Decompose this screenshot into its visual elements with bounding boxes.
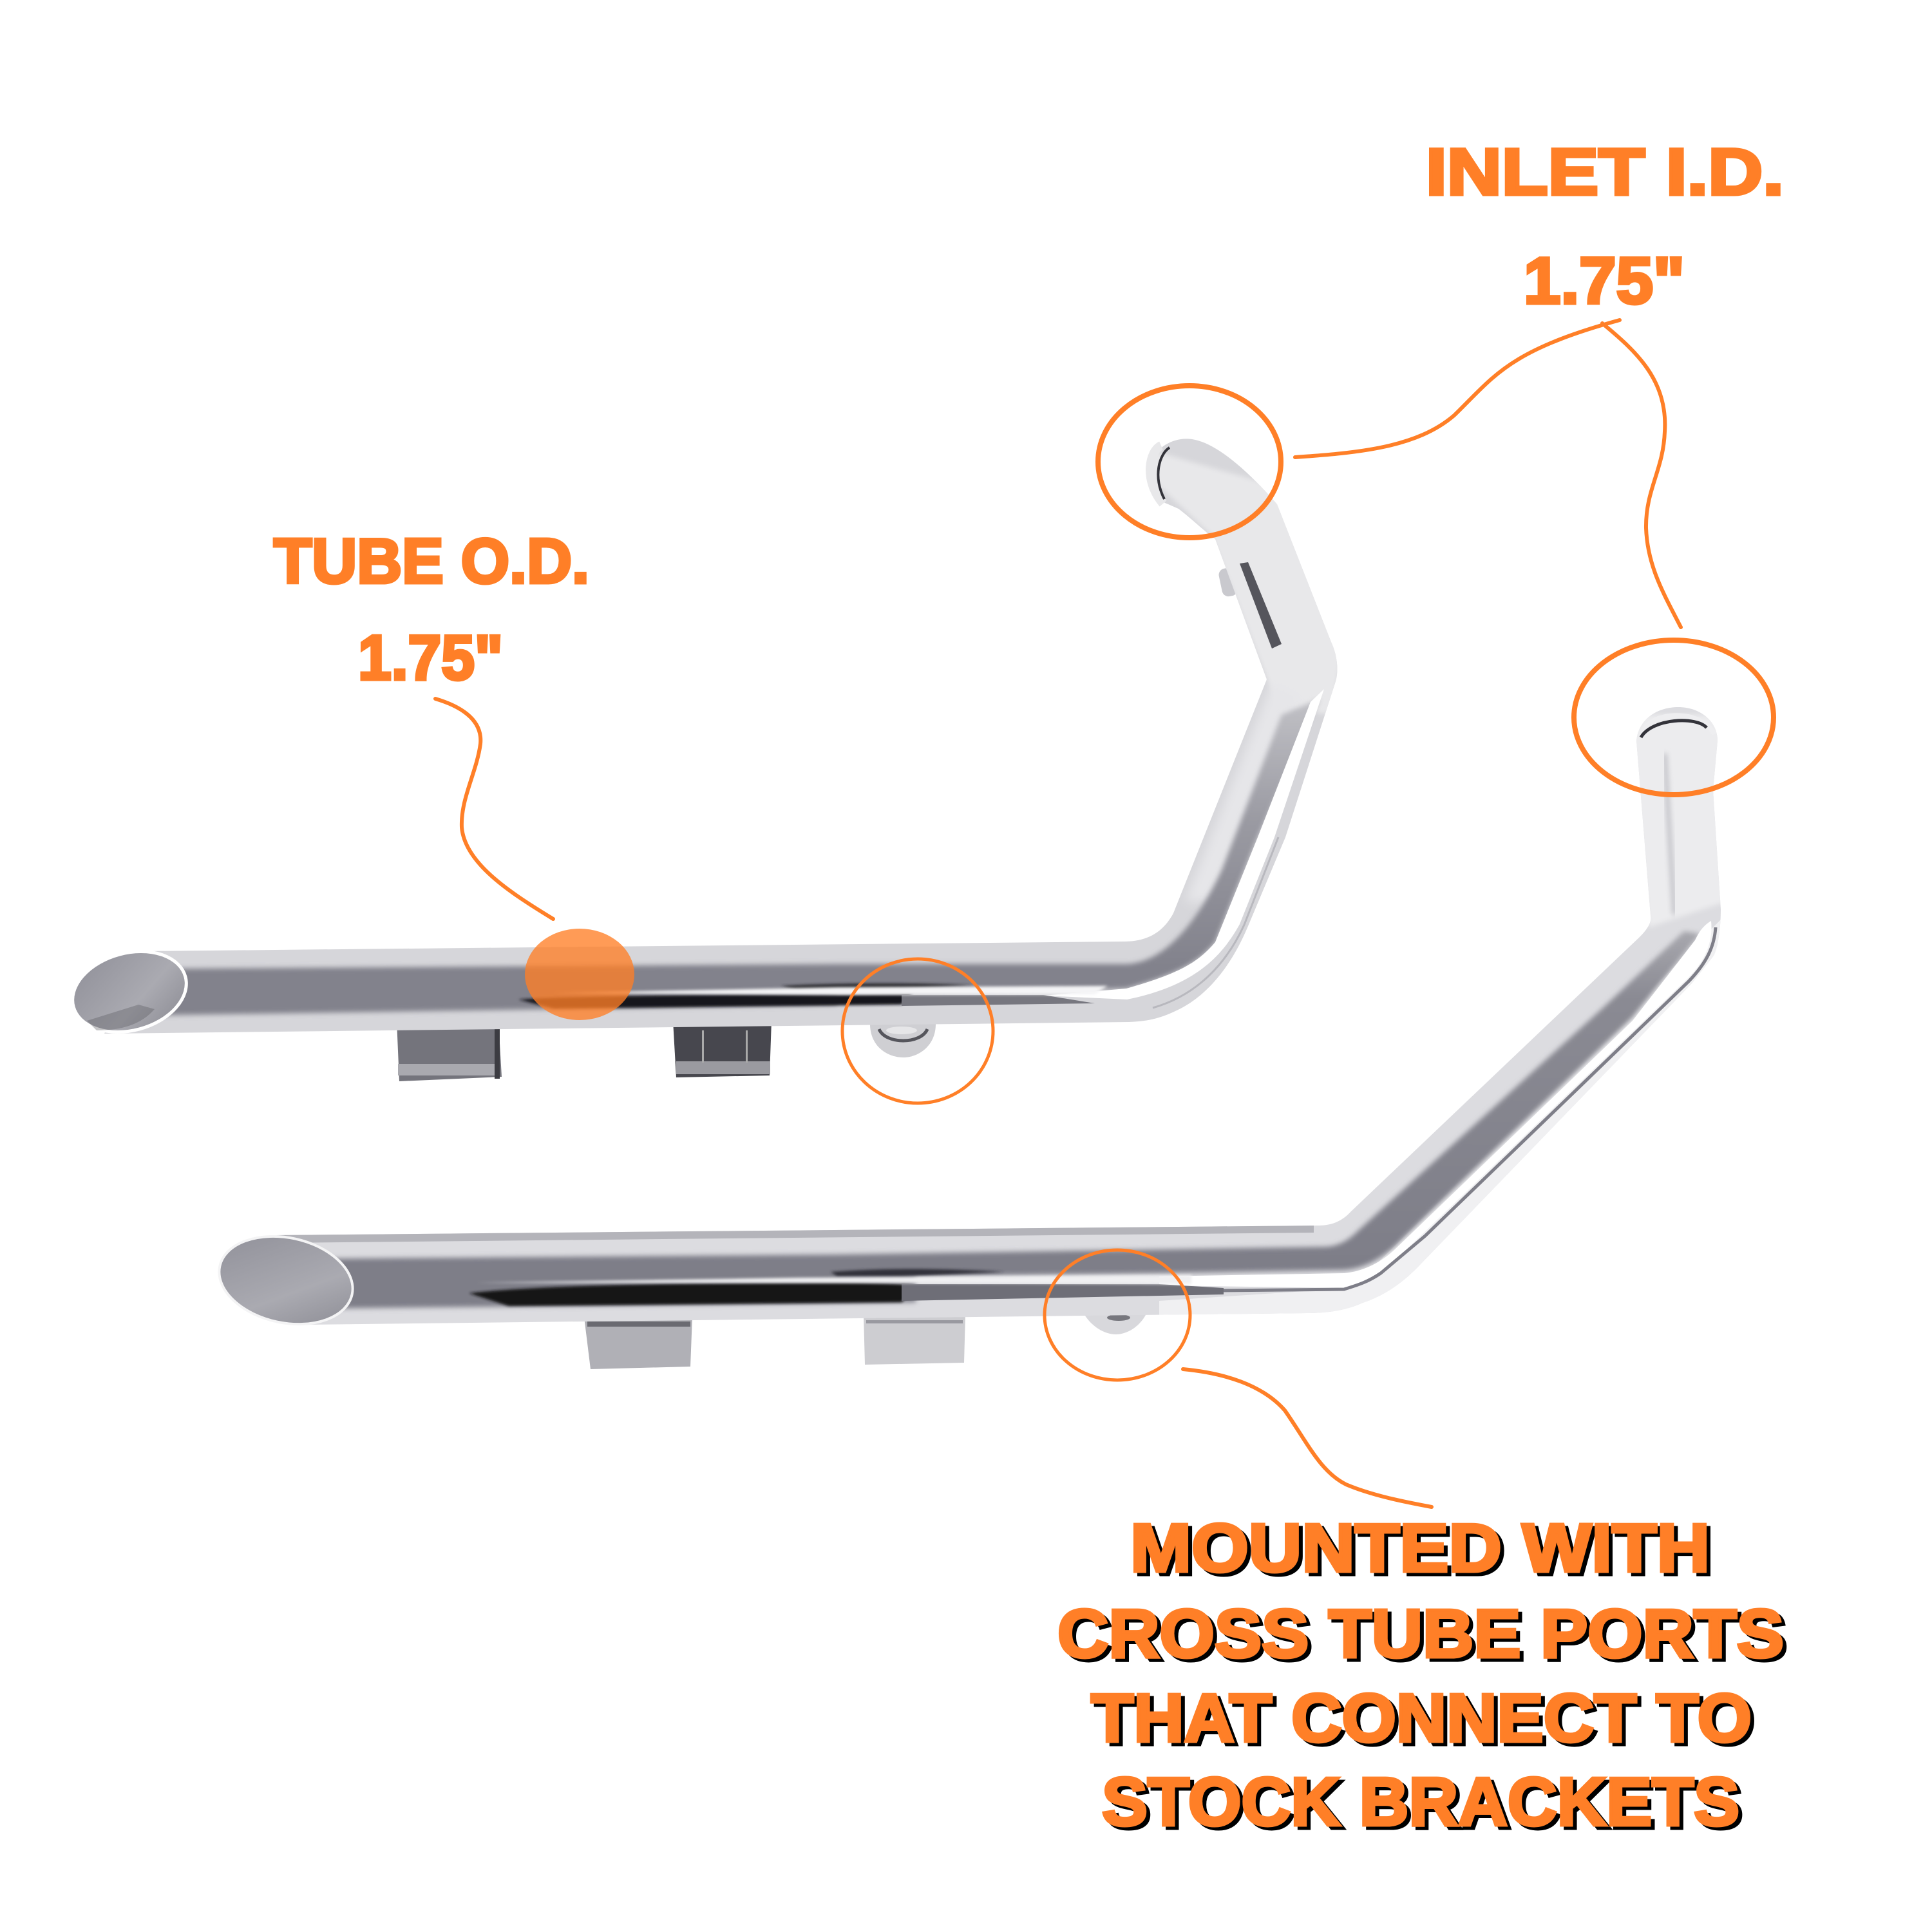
leader line: inlet to lower circle	[1602, 323, 1681, 627]
label: tube outer diameter: 1.75"	[358, 622, 503, 693]
upper exhaust pipe	[64, 425, 1352, 1081]
upper pipe mounting bracket 1	[397, 1021, 502, 1081]
lower pipe mounting bracket 2	[864, 1315, 965, 1365]
label: mounting description: MOUNTED WITH	[1130, 1510, 1710, 1586]
infographic canvas	[74, 147, 1786, 1830]
circle: upper pipe inlet	[1098, 386, 1281, 538]
circle: upper cross tube port	[842, 959, 993, 1103]
lower pipe cross tube port	[1084, 1314, 1146, 1334]
label: mounting description: STOCK BRACKETS	[1102, 1764, 1739, 1840]
leader line: mounted with cross tube ports	[1183, 1369, 1432, 1507]
upper pipe mounting bracket 2	[673, 1021, 772, 1077]
lower pipe mounting bracket 1	[584, 1317, 692, 1369]
label: mounting description: CROSS TUBE PORTS	[1057, 1596, 1784, 1672]
upper pipe cross tube port	[870, 1024, 936, 1057]
lower pipe slash-cut opening	[211, 1225, 361, 1336]
circle: lower cross tube port	[1045, 1250, 1190, 1380]
upper pipe lug behind bend	[1218, 567, 1238, 598]
lower exhaust pipe	[193, 696, 1739, 1369]
label: inlet inner diameter	[1426, 135, 1784, 317]
label: inlet inner diameter: INLET I.D.	[1426, 135, 1784, 209]
circle: lower pipe inlet	[1574, 640, 1774, 795]
label: mounting description: THAT CONNECT TO	[1091, 1680, 1752, 1756]
upper pipe body	[64, 425, 1352, 1043]
lower pipe body	[277, 707, 1721, 1325]
upper pipe inlet rim	[1150, 446, 1170, 504]
lower pipe inlet rim	[1641, 715, 1714, 737]
leader line: tube outer diameter	[435, 699, 553, 919]
label: tube outer diameter	[274, 526, 589, 693]
label: inlet inner diameter: 1.75"	[1524, 244, 1685, 317]
label: mounting description	[1057, 1510, 1784, 1840]
leader line: inlet to upper circle	[1295, 320, 1620, 457]
upper pipe slash-cut opening	[64, 940, 195, 1044]
highlight: tube outer diameter	[525, 929, 634, 1020]
label: tube outer diameter: TUBE O.D.	[274, 526, 589, 596]
